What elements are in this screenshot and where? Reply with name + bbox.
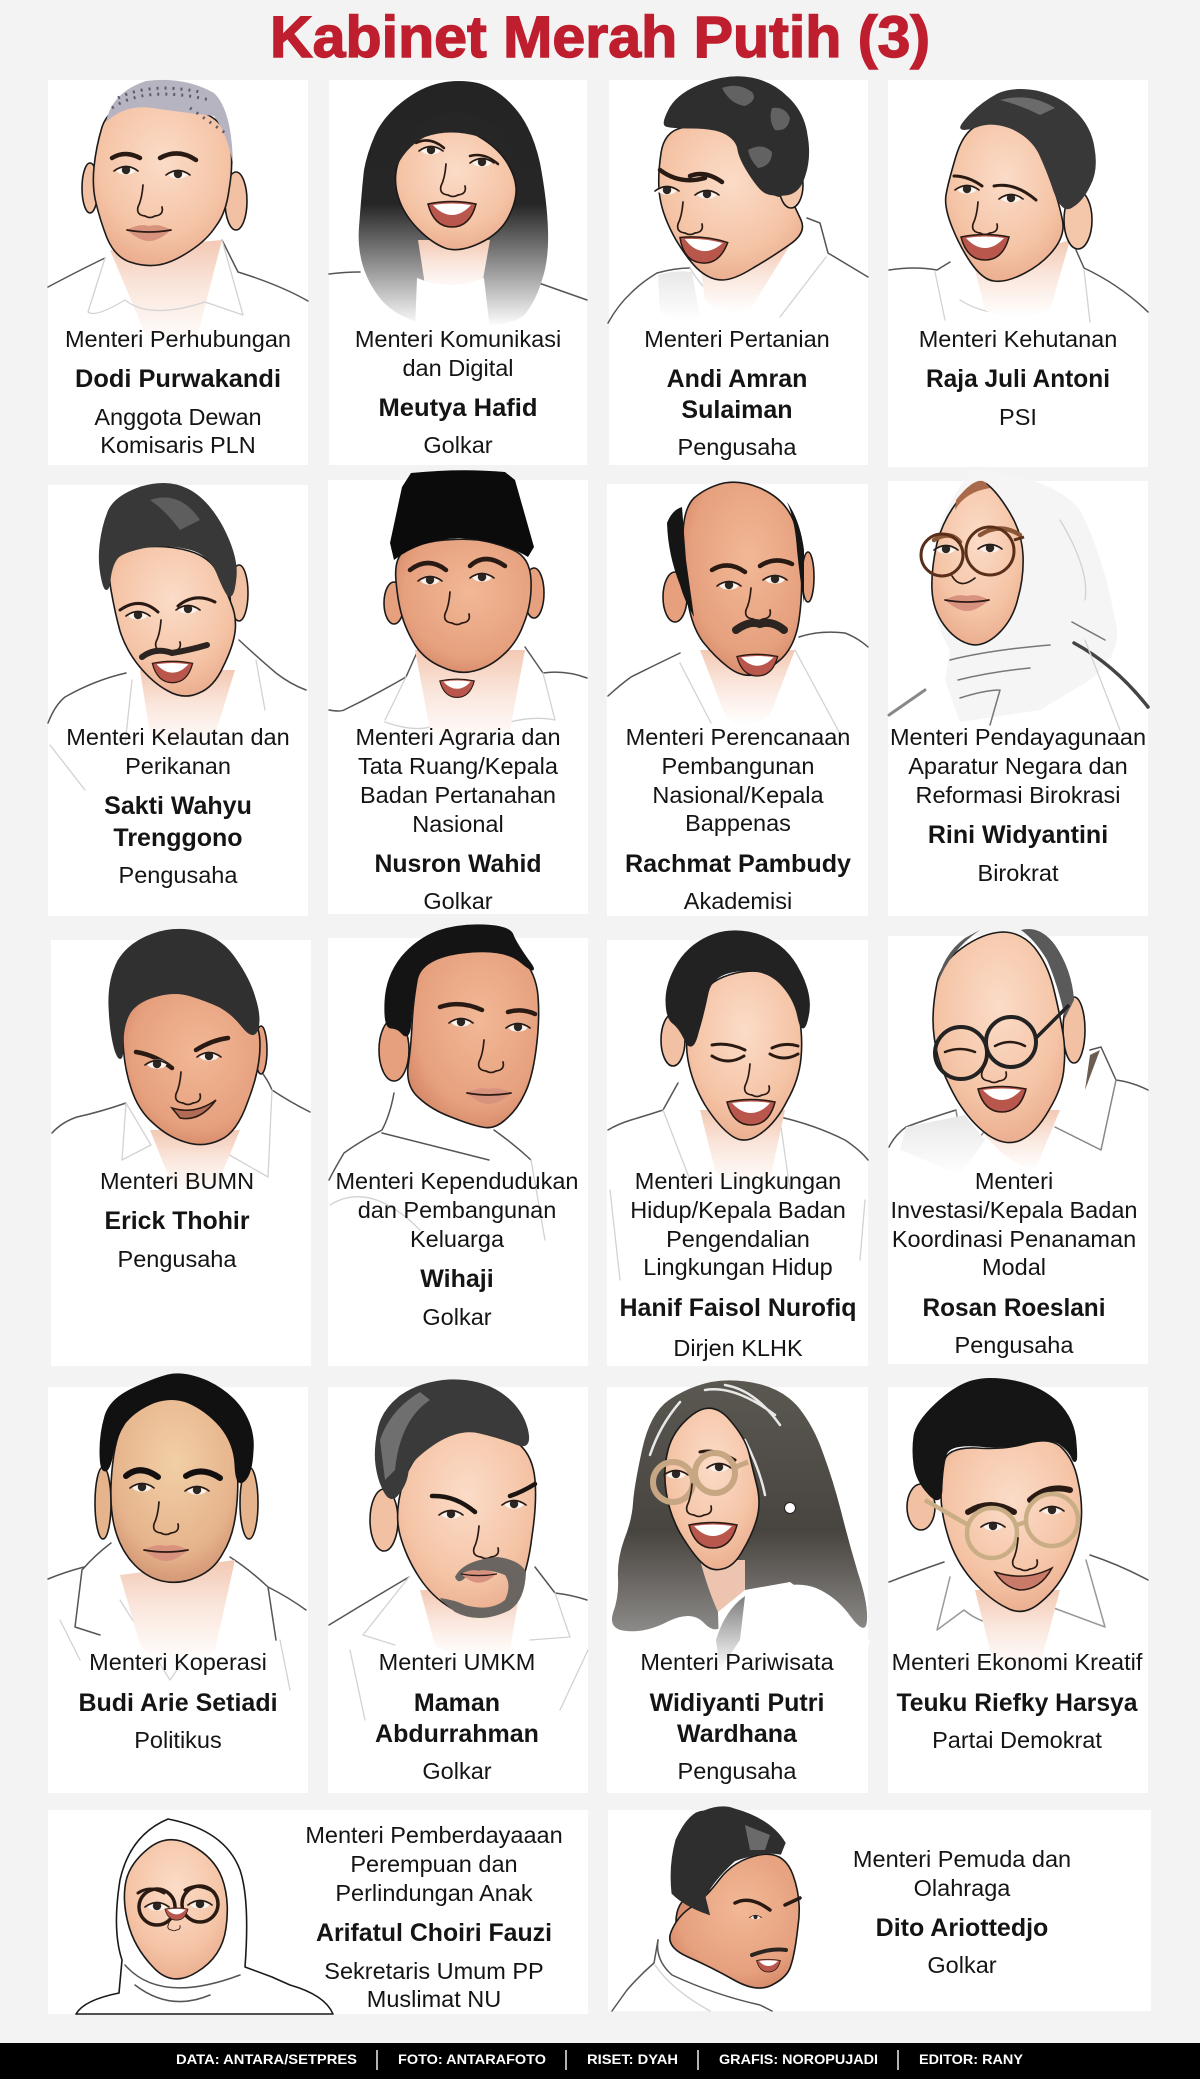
name: Arifatul Choiri Fauzi xyxy=(316,1919,552,1947)
panel: Hanif Faisol Nurofiq xyxy=(607,932,868,1366)
portrait: Dito Ariottedjo xyxy=(612,1808,800,2011)
name: Budi Arie Setiadi xyxy=(78,1689,278,1717)
portrait: Erick Thohir xyxy=(52,930,310,1193)
role: Menteri Komunikasi xyxy=(355,326,561,352)
role: Menteri Pendayagunaan xyxy=(890,724,1146,750)
name: Abdurrahman xyxy=(375,1720,539,1748)
panel: Andi Amran Sulaiman xyxy=(608,78,868,465)
background: Golkar xyxy=(422,1758,492,1784)
name: Wardhana xyxy=(677,1720,798,1748)
background: Golkar xyxy=(423,432,493,458)
background: Komisaris PLN xyxy=(100,432,256,458)
name: Teuku Riefky Harsya xyxy=(896,1689,1139,1717)
role: Lingkungan Hidup xyxy=(643,1254,833,1280)
portrait: Nusron Wahid xyxy=(329,470,587,745)
panel: Rachmat Pambudy xyxy=(607,482,868,916)
panel: Wihaji xyxy=(328,926,588,1366)
role: Menteri Perhubungan xyxy=(65,326,291,352)
background: Dirjen KLHK xyxy=(673,1335,803,1361)
role: Menteri Kelautan dan xyxy=(66,724,290,750)
role: Nasional/Kepala xyxy=(652,782,824,808)
role: Hidup/Kepala Badan xyxy=(630,1197,846,1223)
role: Bappenas xyxy=(685,810,791,836)
footer credits: RISET: DYAH xyxy=(587,2052,678,2067)
role: Menteri Pariwisata xyxy=(640,1649,835,1675)
name: Dodi Purwakandi xyxy=(75,365,281,393)
name: Sakti Wahyu xyxy=(104,792,252,820)
role: dan Digital xyxy=(402,355,514,381)
background: Pengusaha xyxy=(955,1332,1074,1358)
background: Golkar xyxy=(423,888,493,914)
role: Perempuan dan xyxy=(350,1851,518,1877)
role: Menteri Kehutanan xyxy=(919,326,1117,352)
portrait: Rachmat Pambudy xyxy=(608,482,868,743)
portrait: Meutya Hafid xyxy=(329,81,587,330)
portrait: Maman Abdurrahman xyxy=(329,1381,588,1720)
panel: Sakti Wahyu Trenggono xyxy=(48,484,308,916)
name: Maman xyxy=(414,1689,500,1717)
panel: Dodi Purwakandi xyxy=(48,80,308,465)
panel: Meutya Hafid xyxy=(329,80,587,465)
background: PSI xyxy=(999,404,1037,430)
portrait: Rini Widyantini xyxy=(889,470,1148,730)
name: Nusron Wahid xyxy=(374,850,542,878)
role: Badan Pertanahan xyxy=(360,782,556,808)
portrait: Rosan Roeslani xyxy=(889,929,1148,1175)
background: Sekretaris Umum PP xyxy=(324,1958,544,1984)
role: Pembangunan xyxy=(662,753,814,779)
footer credits: GRAFIS: NOROPUJADI xyxy=(719,2052,878,2067)
portrait: Arifatul Choiri Fauzi xyxy=(76,1819,333,2014)
panel: Teuku Riefky Harsya xyxy=(888,1380,1148,1793)
role: Menteri Pemberdayaaan xyxy=(305,1822,563,1848)
background: Golkar xyxy=(927,1952,997,1978)
panel: Rosan Roeslani xyxy=(888,929,1148,1364)
role: Pengendalian xyxy=(666,1226,810,1252)
background: Birokrat xyxy=(978,860,1059,886)
name: Erick Thohir xyxy=(104,1207,250,1235)
name: Wihaji xyxy=(420,1265,494,1293)
role: Menteri xyxy=(975,1168,1053,1194)
role: Keluarga xyxy=(410,1226,505,1252)
footer credits: EDITOR: RANY xyxy=(919,2052,1023,2067)
role: Perlindungan Anak xyxy=(335,1880,533,1906)
role: Menteri Pemuda dan xyxy=(853,1846,1071,1872)
portrait: Budi Arie Setiadi xyxy=(48,1375,306,1690)
role: dan Pembangunan xyxy=(358,1197,556,1223)
panel: Maman Abdurrahman xyxy=(328,1381,588,1793)
name: Rini Widyantini xyxy=(928,821,1108,849)
role: Menteri Perencanaan xyxy=(626,724,850,750)
background: Akademisi xyxy=(684,888,792,914)
portrait: Hanif Faisol Nurofiq xyxy=(608,932,868,1280)
name: Trenggono xyxy=(113,824,243,852)
role: Menteri UMKM xyxy=(379,1649,535,1675)
role: Menteri Koperasi xyxy=(89,1649,267,1675)
name: Rachmat Pambudy xyxy=(625,850,851,878)
footer credits: DATA: ANTARA/SETPRES xyxy=(176,2052,357,2067)
portrait: Teuku Riefky Harsya xyxy=(889,1380,1148,1670)
panel: Arifatul Choiri Fauzi xyxy=(48,1810,588,2014)
panel: Budi Arie Setiadi xyxy=(48,1375,308,1793)
role: Tata Ruang/Kepala xyxy=(358,753,559,779)
name: Sulaiman xyxy=(681,396,793,424)
background: Golkar xyxy=(422,1304,492,1330)
role: Perikanan xyxy=(125,753,231,779)
panel: Dito Ariottedjo xyxy=(608,1808,1151,2011)
portrait: Sakti Wahyu Trenggono xyxy=(48,484,306,790)
name: Andi Amran xyxy=(667,365,807,393)
background: Partai Demokrat xyxy=(932,1727,1102,1753)
panel: Widiyanti Putri Wardhana xyxy=(607,1380,870,1793)
background: Pengusaha xyxy=(119,862,238,888)
name: Raja Juli Antoni xyxy=(926,365,1110,393)
portrait: Widiyanti Putri Wardhana xyxy=(612,1380,870,1680)
panel: Raja Juli Antoni xyxy=(888,80,1148,467)
footer credits xyxy=(0,2043,1200,2079)
panel: Erick Thohir xyxy=(51,930,311,1366)
role: Menteri Lingkungan xyxy=(635,1168,841,1194)
name: Dito Ariottedjo xyxy=(876,1914,1048,1942)
portrait: Andi Amran Sulaiman xyxy=(608,78,868,323)
footer credits: FOTO: ANTARAFOTO xyxy=(398,2052,546,2067)
role: Menteri Agraria dan xyxy=(355,724,561,750)
panel: Nusron Wahid xyxy=(328,470,588,914)
role: Menteri Kependudukan xyxy=(335,1168,579,1194)
role: Menteri BUMN xyxy=(100,1168,254,1194)
background: Muslimat NU xyxy=(367,1986,501,2012)
background: Pengusaha xyxy=(678,434,797,460)
portrait: Dodi Purwakandi xyxy=(48,80,308,345)
role: Olahraga xyxy=(914,1875,1011,1901)
title: Kabinet Merah Putih (3) xyxy=(270,5,930,70)
name: Widiyanti Putri xyxy=(650,1689,824,1717)
name: Rosan Roeslani xyxy=(922,1294,1106,1322)
role: Investasi/Kepala Badan xyxy=(891,1197,1137,1223)
role: Modal xyxy=(982,1254,1046,1280)
role: Nasional xyxy=(412,811,504,837)
role: Menteri Ekonomi Kreatif xyxy=(892,1649,1143,1675)
name: Hanif Faisol Nurofiq xyxy=(620,1294,856,1322)
role: Aparatur Negara dan xyxy=(908,753,1128,779)
portrait: Raja Juli Antoni xyxy=(889,91,1148,322)
background: Politikus xyxy=(134,1727,222,1753)
role: Menteri Pertanian xyxy=(644,326,830,352)
name: Meutya Hafid xyxy=(378,394,538,422)
panel: Rini Widyantini xyxy=(888,470,1148,916)
portrait: Wihaji xyxy=(329,926,545,1240)
background: Anggota Dewan xyxy=(94,404,262,430)
background: Pengusaha xyxy=(118,1246,237,1272)
role: Koordinasi Penanaman xyxy=(892,1226,1136,1252)
role: Reformasi Birokrasi xyxy=(915,782,1121,808)
background: Pengusaha xyxy=(678,1758,797,1784)
